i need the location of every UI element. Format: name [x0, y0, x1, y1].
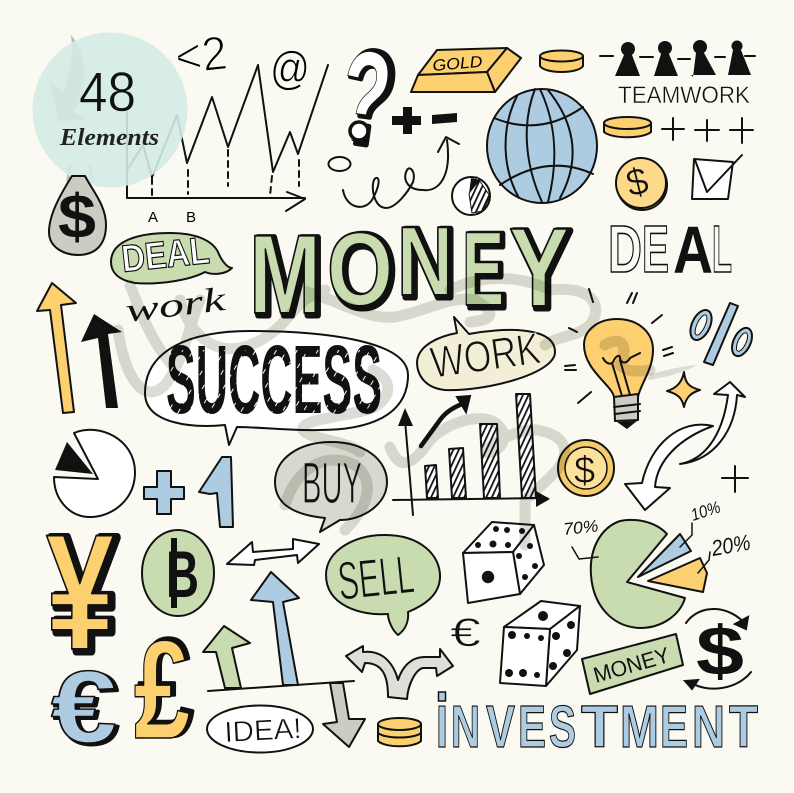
blue up arrow — [251, 572, 299, 685]
curved up arrow — [680, 382, 745, 464]
investment word: E — [660, 694, 688, 760]
gray down arrow — [323, 683, 365, 747]
MONEY headline: Y — [512, 207, 572, 332]
dollar coin middle — [558, 440, 614, 496]
coin stack — [378, 718, 421, 746]
MONEY headline: M — [252, 214, 324, 339]
idea oval: IDEA! — [224, 713, 302, 749]
white pie chart — [54, 430, 135, 517]
MONEY headline — [249, 205, 572, 339]
gold bar — [411, 48, 521, 92]
euro symbol: € — [51, 650, 117, 764]
dollar coin: $ — [622, 160, 653, 206]
plus sign right — [722, 466, 748, 492]
work script word: work — [123, 281, 229, 330]
gold bar: GOLD — [432, 54, 484, 75]
question mark: ? — [333, 21, 405, 176]
teamwork pawns — [600, 40, 755, 77]
MONEY headline: N — [397, 206, 453, 316]
sell speech bubble: SELL — [335, 544, 417, 612]
investment word: V — [486, 694, 515, 760]
curved down arrow — [625, 425, 713, 510]
badge caption: Elements — [59, 125, 159, 151]
MONEY headline: N — [400, 208, 456, 318]
coin top — [540, 50, 583, 72]
bulb watermark tail — [647, 365, 697, 380]
investment word: I — [436, 694, 448, 760]
percentage pie chart: 20% — [709, 530, 752, 561]
MONEY headline: Y — [509, 205, 569, 330]
pound symbol: £ — [138, 609, 194, 766]
work speech bubble: WORK — [428, 324, 543, 388]
dollar coin middle: $ — [574, 450, 595, 492]
ghost watermark inside badge — [52, 40, 92, 180]
plus one — [144, 457, 233, 527]
die two — [500, 601, 580, 686]
die one — [463, 522, 544, 603]
coin second — [604, 117, 651, 137]
money banknote — [582, 634, 683, 694]
sparkle star — [667, 372, 700, 407]
small oval — [328, 157, 350, 171]
investment word: N — [692, 694, 725, 760]
text: L — [712, 212, 732, 287]
success speech bubble — [145, 325, 408, 445]
investment word: T — [729, 694, 758, 760]
badge number: 48 — [79, 60, 136, 123]
investment word — [436, 692, 758, 760]
looping arrow — [343, 137, 459, 208]
arrow baseline — [208, 681, 354, 691]
globe — [487, 89, 597, 203]
badge circle — [32, 32, 188, 188]
yellow up arrow — [37, 283, 76, 413]
outlined DEAL word: A — [673, 213, 713, 288]
investment word: T — [581, 694, 618, 760]
outlined DEAL word: E — [642, 212, 669, 287]
black up arrow — [81, 314, 122, 408]
MONEY headline: M — [249, 212, 321, 337]
at sign: @ — [270, 42, 310, 94]
money bag icon — [49, 176, 106, 255]
success speech bubble: SUCCESS — [166, 325, 382, 434]
three plus signs — [662, 118, 753, 143]
plus and minus — [392, 107, 457, 134]
gray split arrow — [346, 646, 453, 699]
label: less than two: <2 — [173, 27, 230, 85]
buy speech bubble — [275, 442, 387, 532]
yen symbol: ¥ — [46, 500, 114, 684]
percentage pie chart — [562, 497, 752, 628]
money banknote: MONEY — [590, 642, 673, 688]
investment word: E — [518, 694, 546, 760]
green up arrow — [203, 626, 250, 688]
question mark: ? — [331, 21, 399, 172]
MONEY headline: O — [327, 212, 393, 328]
teamwork label: TEAMWORK — [618, 82, 750, 109]
yen symbol: ¥ — [50, 502, 118, 686]
small hatched pie — [452, 177, 490, 215]
line chart with peaks: B — [186, 209, 196, 226]
line chart with peaks — [127, 65, 328, 226]
light bulb — [565, 289, 673, 429]
bitcoin coin: B — [166, 537, 199, 611]
buy speech bubble: BUY — [302, 451, 362, 516]
percentage pie chart: 10% — [688, 497, 723, 525]
bulb watermark stroke — [605, 341, 650, 371]
MONEY headline: E — [462, 210, 504, 328]
line chart with peaks: A — [148, 209, 158, 226]
dollar coin — [616, 158, 667, 210]
dollar with cycle arrows: $ — [696, 612, 744, 690]
percentage pie chart: 70% — [562, 516, 599, 539]
checkbox — [692, 155, 742, 199]
euro symbol: € — [54, 652, 120, 766]
bar chart — [393, 394, 550, 515]
bitcoin coin — [142, 530, 214, 616]
investment word: S — [549, 694, 576, 760]
MONEY headline: O — [330, 214, 396, 330]
double-headed arrow — [227, 539, 319, 565]
dollar with cycle arrows — [685, 609, 751, 690]
investment word: N — [451, 694, 480, 760]
pound symbol: £ — [134, 611, 190, 768]
MONEY headline: E — [465, 212, 507, 330]
script watermark overlay — [118, 278, 596, 545]
outlined DEAL word: D — [608, 212, 642, 287]
idea oval — [207, 706, 313, 752]
investment word: M — [620, 694, 659, 760]
outlined DEAL word — [608, 212, 732, 288]
sell speech bubble — [326, 535, 440, 635]
deal speech bubble: DEAL — [120, 230, 211, 281]
percent sign — [686, 303, 756, 365]
money bag icon: $ — [58, 183, 96, 252]
thin euro: € — [450, 611, 481, 655]
